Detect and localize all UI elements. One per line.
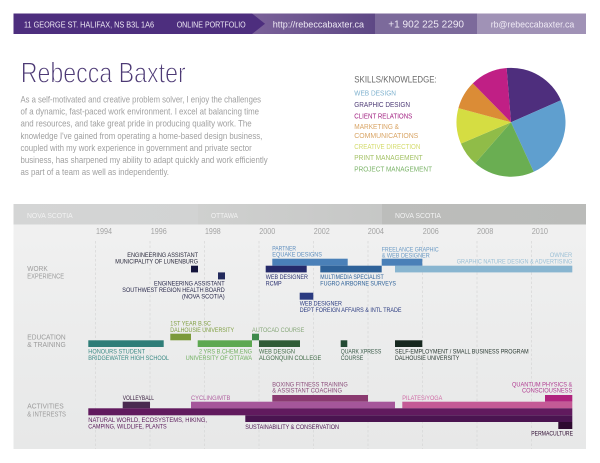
label: multimedia: MULTIMEDIA SPECIALIST (320, 274, 384, 281)
legend: marketing and communications: COMMUNICATIONS (354, 131, 418, 140)
bar: Dalhousie first year (170, 334, 191, 340)
label: boxing: & ASSISTANT COACHING (272, 387, 342, 394)
label: high school (88, 349, 169, 362)
year axis (96, 227, 549, 236)
row label: education and training: & TRAINING (27, 340, 66, 349)
label: permaculture: PERMACULTURE (531, 430, 573, 437)
legend: graphic design: GRAPHIC DESIGN (354, 100, 410, 109)
legend: project management: PROJECT MANAGEMENT (354, 164, 432, 173)
bar: permaculture (558, 422, 572, 429)
legend: marketing and communications: MARKETING & (354, 122, 399, 131)
label: owner: OWNER (550, 252, 572, 259)
bar: Algonquin (259, 340, 300, 347)
bar: web designer RCMP (266, 266, 307, 272)
label: Quark (341, 349, 382, 362)
year axis: 2004 (368, 227, 385, 236)
label: southwest health (122, 281, 225, 300)
bar: freelance (382, 259, 422, 266)
label: RCMP (266, 274, 308, 287)
label: Quark: QUARK XPRESS (341, 349, 382, 356)
label: partner: PARTNER (272, 245, 296, 252)
label: Lunenburg (115, 252, 198, 265)
label: high school: HONOURS STUDENT (88, 349, 145, 356)
label: University of Ottawa: UNIVERSITY OF OTTAWA (186, 355, 252, 362)
panel: timeline (14, 204, 586, 449)
label: freelance (382, 246, 439, 259)
label: boxing (272, 381, 348, 394)
label: multimedia (320, 274, 396, 287)
bar: multimedia specialist (320, 266, 382, 272)
legend: web design: WEB DESIGN (354, 88, 396, 97)
label: AutoCAD: AUTOCAD COURSE (252, 327, 305, 334)
bar: partner (272, 259, 348, 266)
bar: sustainability (245, 415, 572, 422)
label: multimedia: FUGRO AIRBORNE SURVEYS (320, 280, 396, 287)
label: Quark: COURSE (341, 355, 364, 362)
bar: Lunenburg (191, 266, 198, 272)
row label: activities and interests (27, 402, 66, 418)
intro paragraph: and resources, and take great pride in producing quality work. The (20, 118, 252, 129)
row label: work experience (27, 264, 64, 281)
year axis: 1996 (151, 227, 167, 236)
legend: creative direction: CREATIVE DIRECTION (354, 142, 420, 151)
intro paragraph: business, has sharpened my ability to adapt quickly and work efficiently (20, 154, 268, 165)
year axis: 2006 (423, 227, 439, 236)
year axis: 1994 (96, 227, 112, 236)
label: foreign affairs (300, 301, 402, 314)
website: http://rebeccabaxter.ca (273, 19, 365, 30)
label: freelance: & WEB DESIGNER (382, 252, 430, 259)
label: quantum physics (512, 381, 573, 394)
label: Algonquin (259, 349, 322, 362)
activities entries (88, 381, 573, 437)
bar: pilates (402, 402, 572, 408)
phone: +1 902 225 2290 (388, 20, 464, 31)
label: freelance: FREELANCE GRAPHIC (382, 246, 439, 253)
label: partner (272, 245, 322, 259)
location band (14, 204, 586, 224)
bar: natural world (88, 408, 572, 415)
bar: volleyball (123, 402, 150, 408)
intro paragraph: knowledge I've gained from operating a home-based design business, (20, 130, 262, 141)
label: foreign affairs: WEB DESIGNER (300, 301, 342, 308)
intro paragraph: coupled with my work experience in government and private sector (20, 142, 252, 153)
label: natural world: NATURAL WORLD, ECOSYSTEMS, HIKING, (88, 417, 207, 424)
bar: owner (395, 266, 572, 272)
label: partner: EQUAKE DESIGNS (272, 252, 322, 259)
label: natural world (88, 417, 207, 430)
location: Nova Scotia: NOVA SCOTIA (27, 211, 73, 220)
row label: work experience: EXPERIENCE (27, 272, 64, 281)
bar: boxing (272, 395, 368, 402)
title: name: Rebecca Baxter (21, 58, 186, 90)
location: Ottawa: OTTAWA (211, 211, 238, 220)
year axis: 2010 (532, 227, 549, 236)
education entries (88, 320, 529, 362)
label: Algonquin: WEB DESIGN (259, 349, 295, 356)
label: quantum physics: CONSCIOUSNESS (522, 387, 573, 394)
portfolio label: ONLINE PORTFOLIO (177, 20, 246, 29)
row label: activities and interests: & INTERESTS (27, 409, 66, 418)
label: University of Ottawa (186, 349, 252, 362)
label: high school: BRIDGEWATER HIGH SCHOOL (88, 355, 169, 362)
label: natural world: CAMPING, WILDLIFE, PLANTS (88, 423, 167, 430)
bar: AutoCAD (252, 334, 259, 340)
bar: southwest health (218, 272, 225, 279)
email: rb@rebeccabaxter.ca (491, 19, 575, 30)
label: RCMP: RCMP (266, 280, 282, 287)
label: owner (457, 252, 572, 265)
label: Dalhousie first year: 1ST YEAR B.SC (170, 320, 211, 328)
location: Nova Scotia again: NOVA SCOTIA (395, 211, 441, 220)
label: boxing: BOXING FITNESS TRAINING (272, 381, 348, 388)
label: quantum physics: QUANTUM PHYSICS & (512, 381, 573, 388)
contact header bar (14, 14, 586, 34)
year axis: 2000 (259, 227, 276, 236)
label: southwest health: (NOVA SCOTIA) (182, 293, 225, 300)
bar: foreign affairs (300, 293, 313, 300)
legend: marketing and communications (354, 122, 418, 140)
skills legend (354, 74, 437, 173)
label: volleyball: VOLLEYBALL (123, 395, 154, 402)
label: RCMP: WEB DESIGNER (266, 274, 308, 281)
legend: client relations: CLIENT RELATIONS (354, 111, 412, 120)
row label: work experience: WORK (27, 264, 48, 273)
bar: self-employment (395, 340, 422, 347)
bar: Quark (341, 340, 347, 347)
label: foreign affairs: DEPT FOREIGN AFFAIRS & INTL TRADE (300, 307, 402, 314)
pie chart: skills (457, 68, 566, 177)
legend: print management: PRINT MANAGEMENT (354, 153, 423, 162)
year axis: 1998 (205, 227, 221, 236)
intro paragraph (20, 93, 268, 177)
label: Lunenburg: MUNICIPALITY OF LUNENBURG (115, 258, 198, 265)
intro paragraph: of a dynamic, fast-paced work environment. I excel at balancing time (20, 106, 259, 116)
label: cycling: CYCLING/MTB (191, 395, 231, 402)
label: self-employment: SELF-EMPLOYMENT / SMALL BUSINESS PROGRAM (395, 349, 529, 356)
legend heading: SKILLS/KNOWLEDGE: (354, 74, 437, 84)
label: Algonquin: ALGONQUIN COLLEGE (259, 355, 322, 362)
label: Dalhousie first year (170, 320, 234, 334)
label: pilates: PILATES/YOGA (402, 395, 443, 402)
label: University of Ottawa: 2 YRS B.CHEM.ENG (199, 349, 252, 356)
work experience entries (115, 245, 572, 314)
row label: activities and interests: ACTIVITIES (27, 402, 64, 411)
bar: quantum physics (545, 395, 572, 402)
bar: University of Ottawa (198, 340, 252, 347)
intro paragraph: As a self-motivated and creative problem solver, I enjoy the challenges (20, 93, 261, 104)
row label: education and training: EDUCATION (27, 332, 66, 341)
label: self-employment (395, 349, 529, 362)
address: 11 GEORGE ST. HALIFAX, NS B3L 1A6 (24, 20, 154, 29)
label: Dalhousie first year: DALHOUSIE UNIVERSITY (170, 327, 234, 334)
label: Lunenburg: ENGINEERING ASSISTANT (127, 252, 198, 259)
bar: high school (88, 340, 164, 347)
label: southwest health: ENGINEERING ASSISTANT (154, 281, 225, 288)
bar: cycling (191, 402, 395, 408)
label: owner: GRAPHIC NATURE DESIGN & ADVERTISING (457, 258, 572, 265)
year axis: 2008 (477, 227, 494, 236)
label: southwest health: SOUTHWEST REGION HEALTH BOARD (122, 287, 225, 294)
year axis: 2002 (314, 227, 330, 236)
label: self-employment: DALHOUSIE UNIVERSITY (395, 355, 460, 362)
intro paragraph: as part of a team as well as independently. (20, 166, 169, 177)
row label: education and training (27, 332, 66, 349)
label: sustainability: SUSTAINABILITY & CONSERVATION (245, 424, 339, 431)
